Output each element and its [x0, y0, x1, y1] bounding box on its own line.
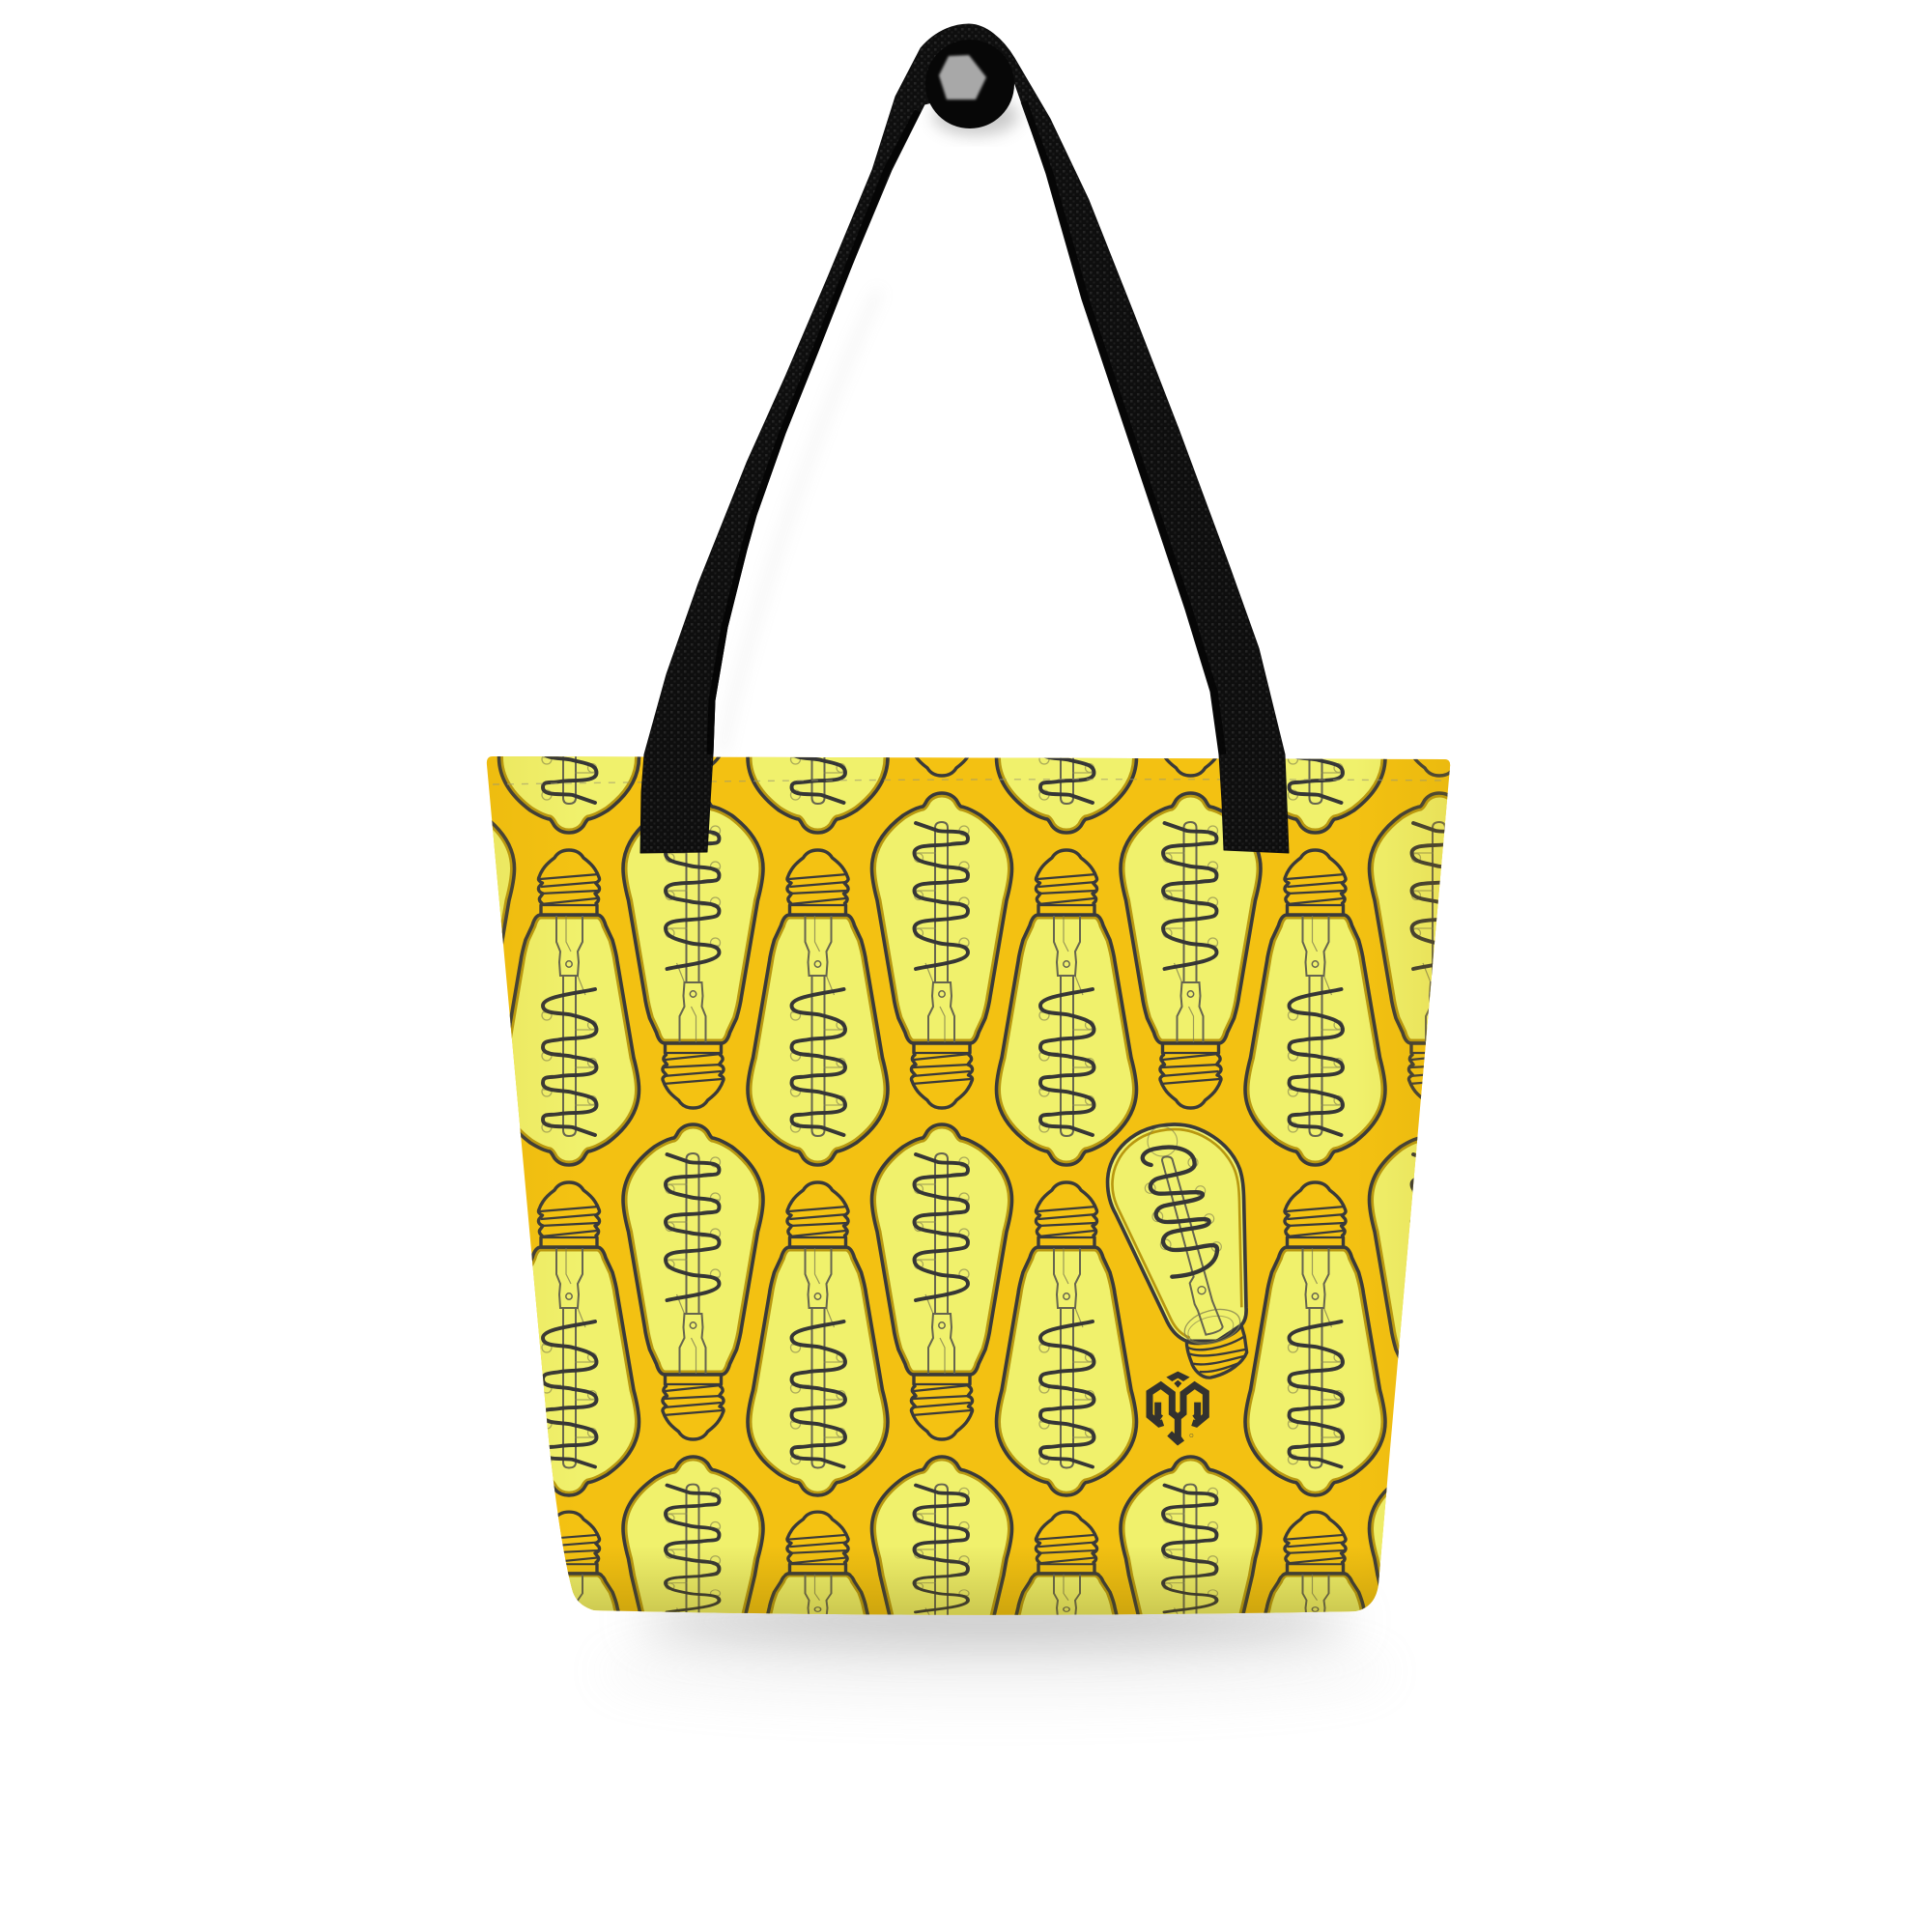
bulb pattern: inverted row 1: [375, 793, 1509, 1108]
tilted bulb accent: [1108, 1124, 1247, 1378]
bulb pattern: inverted row 0: [375, 461, 1509, 776]
tote bag body: [487, 756, 1451, 1615]
bulb pattern: upright row 2: [498, 1182, 1385, 1497]
peg shadow: [933, 97, 1018, 135]
floor shadow: [599, 1596, 1391, 1704]
bulb pattern: [375, 461, 1509, 1830]
handle straps: [640, 24, 1289, 853]
side shading: [493, 756, 1450, 1495]
bulb pattern: upright row 3: [498, 1515, 1385, 1830]
logo mark: [1150, 1372, 1206, 1441]
peg hex head: [939, 55, 986, 99]
pattern compressed at bottom fold: lower slice: [375, 769, 1509, 1754]
pattern compressed at bottom fold: upper slice: [375, 511, 1509, 1811]
illustration: tote bag on peg: [487, 23, 1451, 1689]
strap shadow: [723, 290, 879, 753]
fabric base colour: [464, 744, 1468, 1633]
top hem stitching: [493, 780, 1447, 784]
bulb pattern: upright row 0: [498, 518, 1385, 833]
bottom fold shading: [566, 1559, 1380, 1615]
bulb pattern: inverted row 2: [375, 1124, 1509, 1439]
bulb pattern: inverted row 3: [375, 1457, 1509, 1772]
peg: [925, 40, 1014, 128]
bulb pattern: upright row 1: [498, 850, 1385, 1165]
